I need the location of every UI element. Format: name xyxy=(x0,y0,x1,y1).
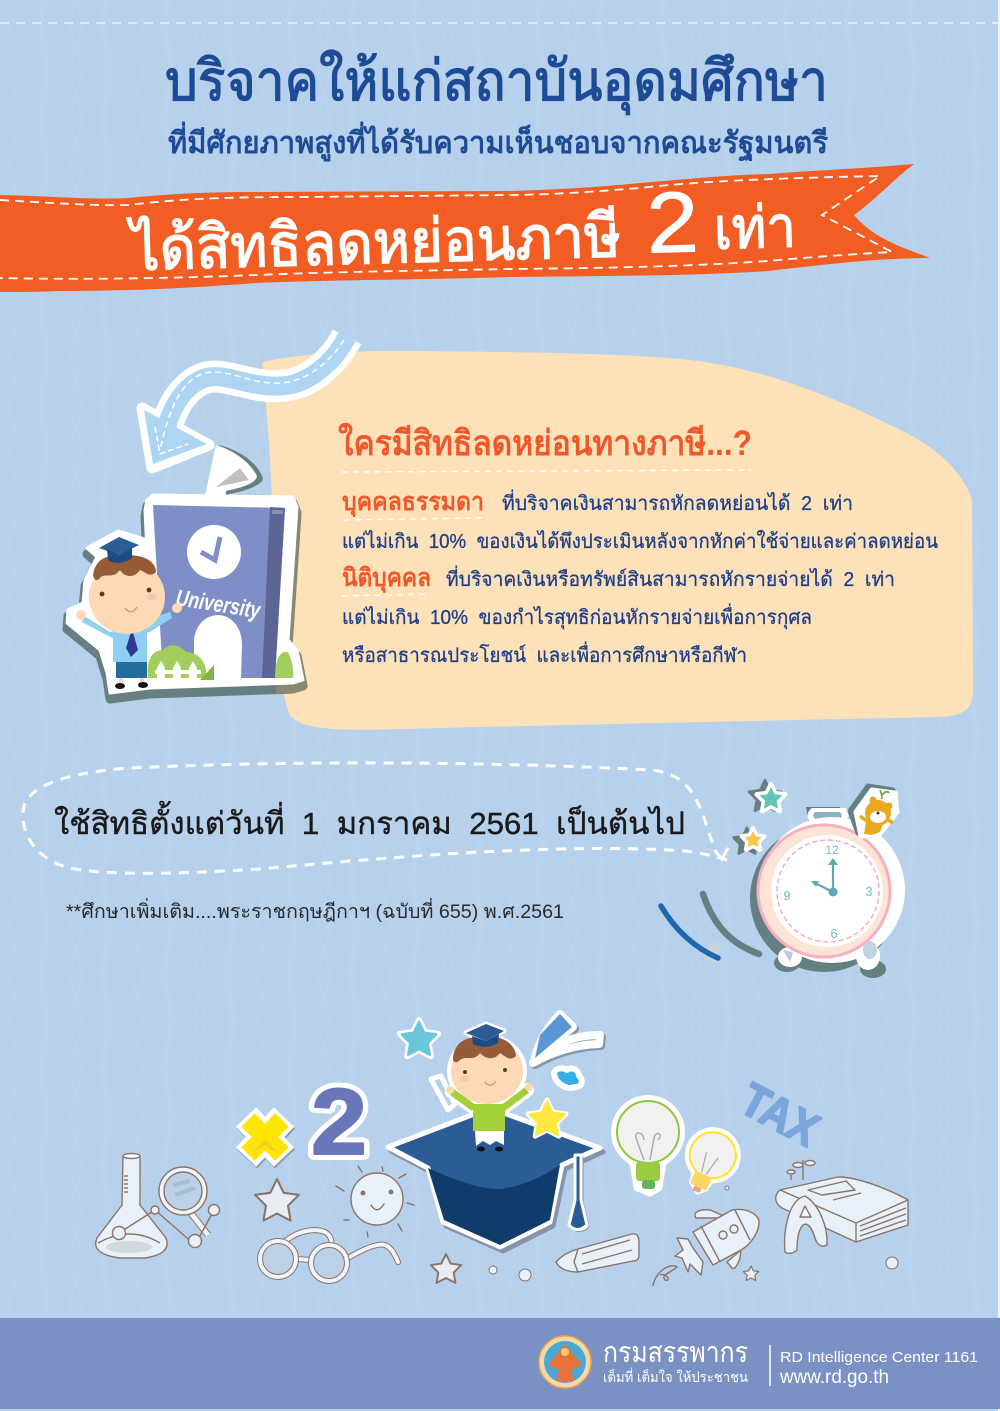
grey star doodle xyxy=(255,1179,299,1221)
start date bubble xyxy=(23,763,728,873)
tax lettering: TAX xyxy=(732,1072,828,1156)
emblem xyxy=(539,1336,591,1388)
sticker body xyxy=(759,817,905,963)
cap lower part xyxy=(428,1165,560,1245)
rocket doodle xyxy=(653,1209,759,1286)
clock dial xyxy=(758,825,890,957)
door xyxy=(194,615,242,678)
small star doodle xyxy=(431,1254,461,1283)
clock top knob xyxy=(808,808,848,835)
start date text: ใช้สิทธิตั้งแต่วันที่ 1 มกราคม 2561 เป็นต้นไป xyxy=(54,801,685,841)
arrow xyxy=(142,337,347,468)
individuals line 2: แต่ไม่เกิน 10% ของเงินได้พึงประเมินหลังจากหักค่าใช้จ่ายและค่าลดหย่อน xyxy=(342,530,938,553)
body xyxy=(113,628,147,662)
swooshes xyxy=(533,1014,602,1065)
yellow light bulb xyxy=(669,1118,750,1206)
pencil doodle xyxy=(556,1234,639,1272)
website: www.rd.go.th xyxy=(779,1367,889,1388)
university illustration xyxy=(67,445,303,699)
university lettering: University xyxy=(174,584,263,623)
clock numerals: 12 xyxy=(825,843,839,857)
title: บริจาคให้แก่สถาบันอุดมศึกษา xyxy=(165,49,828,115)
flag shape xyxy=(204,445,263,500)
blue cloud xyxy=(554,1068,582,1088)
footer xyxy=(0,1318,1000,1409)
ribbon headline: ได้สิทธิลดหย่อนภาษี xyxy=(126,202,622,283)
flask doodle xyxy=(96,1154,167,1258)
graduation cap xyxy=(99,537,139,555)
reference note: **ศึกษาเพิ่มเติม....พระราชกฤษฎีกาฯ (ฉบับที่ 655) พ.ศ.2561 xyxy=(66,898,564,923)
child head xyxy=(451,1038,523,1104)
ribbon headline: เท่า xyxy=(713,195,797,262)
teal star xyxy=(400,1020,438,1056)
clock illustration: 9 xyxy=(783,888,791,903)
contact center: RD Intelligence Center 1161 xyxy=(780,1349,978,1366)
agency name: กรมสรรพากร xyxy=(603,1337,748,1369)
arms xyxy=(82,612,172,640)
child body xyxy=(473,1104,505,1131)
clock hands xyxy=(815,862,833,892)
clock illustration: 6 xyxy=(830,926,838,941)
sticker backing xyxy=(67,495,303,693)
child head outline xyxy=(447,1034,527,1108)
number two: 2 xyxy=(311,1069,367,1174)
individuals line 1: ที่บริจาคเงินสามารถหักลดหย่อนได้ 2 เท่า xyxy=(502,489,853,515)
panel: who gets the deduction xyxy=(262,351,973,730)
sun doodle xyxy=(336,1166,414,1237)
juristic line 1: ที่บริจาคเงินหรือทรัพย์สินสามารถหักรายจ่ายได้ 2 เท่า xyxy=(446,565,895,591)
juristic line 3: หรือสาธารณประโยชน์ และเพื่อการศึกษาหรือกีฬา xyxy=(342,641,747,667)
graduation cap with child xyxy=(388,1014,603,1251)
book doodle xyxy=(776,1160,908,1253)
sticker shadow xyxy=(67,501,303,699)
magnifier and molecule doodle xyxy=(112,1167,220,1248)
tassel xyxy=(569,1155,589,1232)
ribbon banner xyxy=(0,164,930,292)
bushes and fence xyxy=(148,645,206,678)
building xyxy=(153,505,285,678)
panel heading: ใครมีสิทธิลดหย่อนทางภาษี...? xyxy=(338,422,752,463)
juristic label: นิติบุคคล xyxy=(342,564,431,594)
glasses doodle xyxy=(260,1230,398,1281)
tagline: เต็มที่ เต็มใจ ให้ประชาชน xyxy=(603,1368,748,1385)
child xyxy=(431,1024,533,1152)
clock illustration xyxy=(661,780,905,978)
tiny star xyxy=(743,1266,759,1280)
teal star xyxy=(749,780,785,811)
number two: 2 xyxy=(311,1069,367,1174)
cap board xyxy=(388,1108,600,1247)
green light bulb xyxy=(611,1095,685,1197)
ribbon headline: 2 xyxy=(645,174,700,272)
yellow star xyxy=(528,1100,566,1136)
head xyxy=(89,560,165,634)
child arms outline xyxy=(452,1090,527,1108)
legs and shoes xyxy=(119,678,123,685)
child arms xyxy=(452,1090,527,1108)
child cap xyxy=(466,1024,504,1041)
subtitle: ที่มีศักยภาพสูงที่ได้รับความเห็นชอบจากคณะรัฐมนตรี xyxy=(168,121,828,163)
yellow star xyxy=(734,828,764,853)
individuals label: บุคคลธรรมดา xyxy=(342,488,484,518)
clock illustration: 3 xyxy=(865,884,873,899)
motion lines xyxy=(703,940,723,964)
clock shadow xyxy=(750,824,898,972)
cap shadow xyxy=(391,1112,603,1251)
scroll xyxy=(431,1076,455,1110)
small circles xyxy=(489,1186,898,1281)
bear xyxy=(850,786,897,836)
yellow times sign xyxy=(246,1117,285,1159)
juristic line 2: แต่ไม่เกิน 10% ของกำไรสุทธิก่อนหักรายจ่ายเพื่อการกุศล xyxy=(342,603,812,630)
building clock xyxy=(187,525,241,579)
ribbon headline xyxy=(126,172,797,286)
boy xyxy=(76,537,182,689)
